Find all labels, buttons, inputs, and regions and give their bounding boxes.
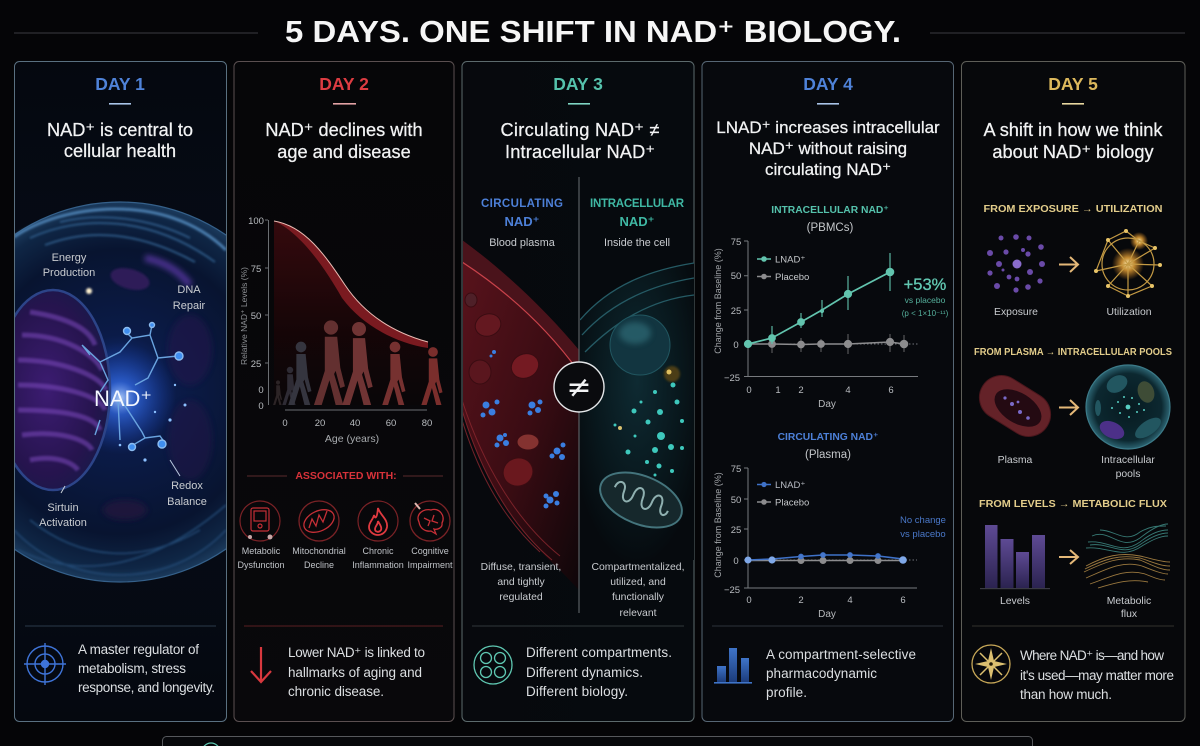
day 5 takeaway: it's used—may matter more: [1020, 668, 1174, 683]
day 5 takeaway: Where NAD⁺ is—and how: [1020, 648, 1164, 663]
day 3 heading: Circulating NAD⁺ ≠: [500, 120, 660, 140]
line chart: circulating NAD+: 2: [798, 595, 804, 606]
line chart: circulating NAD+: 25: [731, 525, 741, 536]
labels: associated conditions: [237, 546, 453, 570]
line chart: intracellular NAD+: 4: [845, 385, 851, 396]
associated with heading: ASSOCIATED WITH:: [295, 470, 397, 482]
caption: circulating: Diffuse, transient,: [481, 562, 561, 573]
line chart: intracellular NAD+: 75: [731, 237, 741, 248]
caption: circulating: [481, 562, 561, 603]
panel: day 3: [462, 62, 694, 722]
caption: intracellular: functionally: [612, 592, 665, 603]
label: intracellular NAD+: Inside the cell: [604, 237, 670, 249]
caption: intracellular: relevant: [620, 608, 657, 619]
label: metabolic flux: Metabolic: [1107, 596, 1151, 607]
icon: plasma vessel: [971, 367, 1059, 445]
callout: no change: No change: [900, 515, 946, 526]
line chart: intracellular NAD+: [713, 237, 949, 410]
day 1 takeaway: [78, 642, 215, 695]
molecule: [82, 322, 183, 450]
icon: chronic inflammation: [358, 501, 398, 541]
callout: no change: [900, 515, 946, 540]
day 2 heading: [265, 74, 423, 162]
chart heading: intracellular: INTRACELLULAR NAD⁺: [771, 205, 889, 216]
panel: day 1: [14, 61, 227, 722]
day 5 takeaway: [1020, 648, 1174, 702]
line chart: intracellular NAD+: Change from Baseline (%): [713, 248, 723, 354]
chart heading: circulating: CIRCULATING NAD⁺: [778, 432, 878, 443]
day 1 takeaway: response, and longevity.: [78, 680, 215, 695]
labels: associated conditions: Metabolic: [242, 546, 281, 556]
day 4 takeaway: profile.: [766, 685, 807, 700]
day 4 heading: [716, 74, 940, 179]
bottom panel: cropped edge: [162, 736, 1032, 746]
day 1 heading: NAD⁺ is central to: [47, 120, 193, 140]
day 5 heading: about NAD⁺ biology: [992, 142, 1155, 162]
day 4 heading: LNAD⁺ increases intracellular: [716, 118, 940, 137]
label: sirtuin activation: [39, 502, 87, 529]
line chart: circulating NAD+: Change from Baseline (%): [713, 472, 723, 578]
label: metabolic flux: flux: [1121, 609, 1138, 620]
chart: NAD+ decline with age: 25: [251, 359, 261, 370]
chart: NAD+ decline with age: Relative NAD⁺ Levels (%): [239, 267, 249, 365]
chart: NAD+ decline with age: 50: [251, 311, 261, 322]
line chart: intracellular NAD+: 6: [888, 385, 894, 396]
line chart: circulating NAD+: 0: [746, 595, 752, 606]
series: placebo: [748, 558, 903, 564]
line chart: circulating NAD+: 0: [733, 556, 739, 567]
callout: +53%: [902, 276, 949, 318]
label: circulating NAD+: [481, 198, 563, 249]
day 5 heading: A shift in how we think: [984, 120, 1163, 140]
day 2 heading: age and disease: [277, 142, 411, 162]
arrow: [1059, 257, 1078, 272]
day 2 heading: NAD⁺ declines with: [265, 120, 423, 140]
line chart: intracellular NAD+: 50: [731, 271, 741, 282]
illustration: cell with NAD+: [15, 201, 226, 583]
callout: +53%: vs placebo: [905, 295, 946, 305]
line chart: circulating NAD+: 75: [731, 464, 741, 475]
legend: LNAD⁺: [775, 480, 805, 491]
mitochondrion: [599, 472, 683, 528]
label: intracellular pools: [1101, 455, 1155, 480]
label: DNA repair: DNA: [177, 284, 201, 296]
chart heading: intracellular: [771, 205, 889, 234]
icon: target: [24, 643, 66, 685]
label: exposure: Exposure: [994, 307, 1038, 318]
line chart: circulating NAD+: −25: [724, 585, 740, 596]
line chart: circulating NAD+: 50: [731, 495, 741, 506]
label: intracellular NAD+: NAD⁺: [619, 214, 655, 229]
panel: day 2: [234, 62, 454, 722]
line chart: intracellular NAD+: Day: [818, 399, 836, 410]
labels: associated conditions: Inflammation: [352, 560, 404, 570]
labels: associated conditions: Cognitive: [411, 546, 449, 556]
legend: Placebo: [775, 272, 809, 283]
chart: NAD+ decline with age: 100: [248, 216, 264, 227]
chart: NAD+ decline with age: 20: [315, 418, 325, 429]
day 2 heading: DAY 2: [319, 74, 369, 94]
chart: NAD+ decline with age: 80: [422, 418, 432, 429]
icon: metabolic dysfunction: [240, 501, 280, 541]
title: 5 DAYS. ONE SHIFT IN NAD⁺ BIOLOGY.: [285, 14, 901, 49]
heading: levels to flux: FROM LEVELS → METABOLIC FLUX: [979, 499, 1167, 510]
label: NAD+ centre: NAD⁺: [94, 386, 152, 411]
mitochondrion: [15, 288, 112, 492]
label: intracellular NAD+: INTRACELLULAR: [590, 198, 685, 210]
chart: NAD+ decline with age: 75: [251, 264, 261, 275]
series: LNAD+: [744, 253, 894, 348]
day 4 takeaway: A compartment-selective: [766, 647, 916, 662]
silhouettes: ageing figures: [273, 320, 443, 405]
day 4 heading: DAY 4: [803, 74, 853, 94]
icon: compass star: [972, 645, 1010, 683]
chart: NAD+ decline with age: 0: [258, 385, 264, 396]
day 3 heading: [500, 74, 660, 162]
illustration: blood vessel: [462, 240, 579, 590]
day 3 heading: DAY 3: [553, 74, 603, 94]
icon: levels bars: [980, 525, 1050, 589]
caption: intracellular: Compartmentalized,: [592, 562, 684, 573]
day 1 heading: DAY 1: [95, 74, 145, 94]
line chart: intracellular NAD+: 2: [798, 385, 804, 396]
label: intracellular pools: pools: [1116, 469, 1140, 480]
day 5 heading: [984, 74, 1163, 162]
label: utilization: Utilization: [1106, 307, 1152, 318]
labels: associated conditions: Impairment: [407, 560, 453, 570]
line chart: intracellular NAD+: 0: [733, 340, 739, 351]
series: placebo: [748, 334, 908, 354]
illustration: intracellular compartment: [580, 263, 694, 560]
labels: associated conditions: Dysfunction: [237, 560, 285, 570]
arrow: [1059, 550, 1078, 564]
day 1 heading: cellular health: [64, 141, 176, 161]
chart: NAD+ decline with age: Age (years): [325, 433, 379, 445]
icon: not equal: [554, 362, 604, 412]
callout: +53%: (p < 1×10⁻¹¹): [902, 309, 949, 318]
chart heading: circulating: [778, 432, 878, 461]
day 3 takeaway: Different biology.: [526, 684, 628, 699]
chart: NAD+ decline with age: 0: [258, 401, 264, 412]
day 5 heading: DAY 5: [1048, 74, 1098, 94]
label: DNA repair: Repair: [173, 300, 206, 312]
label: metabolic flux: [1107, 596, 1151, 620]
day 2 takeaway: Lower NAD⁺ is linked to: [288, 645, 425, 660]
label: circulating NAD+: NAD⁺: [504, 214, 540, 229]
chart: NAD+ decline with age: 40: [350, 418, 360, 429]
day 4 heading: circulating NAD⁺: [765, 160, 891, 179]
day 5 takeaway: than how much.: [1020, 687, 1112, 702]
centre divider: [578, 177, 580, 613]
line chart: circulating NAD+: 6: [900, 595, 906, 606]
day 1 takeaway: A master regulator of: [78, 642, 199, 657]
day 2 takeaway: hallmarks of aging and: [288, 665, 422, 680]
caption: circulating: and tightly: [497, 577, 545, 588]
series: LNAD+: [744, 553, 907, 564]
callout: no change: vs placebo: [900, 529, 946, 540]
labels: associated conditions: Mitochondrial: [292, 546, 346, 556]
label: sirtuin activation: Activation: [39, 517, 87, 529]
panel: day 5: [962, 62, 1185, 722]
icon: four compartments: [474, 646, 512, 684]
chart: NAD+ decline with age: 0: [282, 418, 288, 429]
label: redox balance: Redox: [171, 480, 203, 492]
day 3 takeaway: Different compartments.: [526, 645, 672, 660]
label: redox balance: [167, 480, 207, 508]
line chart: intracellular NAD+: −25: [724, 373, 740, 384]
label: energy production: Production: [43, 267, 95, 279]
day 2 takeaway: [288, 645, 425, 699]
legend: Placebo: [775, 498, 809, 508]
label: circulating NAD+: Blood plasma: [489, 237, 555, 249]
icon: down arrow: [251, 647, 271, 682]
chart: NAD+ decline with age: 60: [386, 418, 396, 429]
arrow: [1059, 400, 1078, 415]
caption: circulating: regulated: [499, 592, 543, 603]
label: energy production: [43, 252, 95, 279]
label: energy production: Energy: [52, 252, 87, 264]
day 1 heading: [47, 74, 193, 161]
icon: utilization network: [1094, 229, 1162, 298]
label: redox balance: Balance: [167, 496, 207, 508]
chart heading: circulating: (Plasma): [805, 449, 851, 461]
icon: cognitive impairment: [410, 501, 450, 541]
chart heading: intracellular: (PBMCs): [807, 222, 853, 234]
day 3 takeaway: [526, 645, 672, 699]
icon: exposure dots: [987, 234, 1045, 293]
icon: cell with pools: [1086, 365, 1170, 449]
caption: intracellular: utilized, and: [610, 577, 666, 588]
labels: associated conditions: Chronic: [362, 546, 394, 556]
callout: +53%: +53%: [904, 276, 947, 294]
heading: exposure to utilization: FROM EXPOSURE → UTILIZATION: [984, 204, 1162, 215]
day 2 takeaway: chronic disease.: [288, 684, 384, 699]
label: levels: Levels: [1000, 596, 1030, 607]
icon: mitochondrial decline: [299, 501, 339, 541]
line chart: intracellular NAD+: 25: [731, 306, 741, 317]
line chart: intracellular NAD+: 0: [746, 385, 752, 396]
day 1 takeaway: metabolism, stress: [78, 661, 186, 676]
icon: not equal: ≠: [566, 370, 592, 405]
line chart: circulating NAD+: [713, 464, 946, 620]
label: circulating NAD+: CIRCULATING: [481, 198, 563, 210]
line chart: circulating NAD+: 4: [847, 595, 853, 606]
day 4 heading: NAD⁺ without raising: [749, 139, 907, 158]
legend: [757, 480, 809, 508]
label: intracellular NAD+: [590, 198, 685, 249]
day 4 takeaway: pharmacodynamic: [766, 666, 877, 681]
heading: plasma to intracellular: FROM PLASMA → INTRACELLULAR POOLS: [974, 347, 1172, 358]
day 3 takeaway: Different dynamics.: [526, 665, 643, 680]
day 4 takeaway: [766, 647, 916, 700]
day 3 heading: Intracellular NAD⁺: [505, 142, 655, 162]
icon: metabolic flux: [1084, 524, 1170, 588]
legend: [757, 254, 809, 283]
label: intracellular pools: Intracellular: [1101, 455, 1155, 466]
label: plasma: Plasma: [998, 455, 1033, 466]
line chart: circulating NAD+: Day: [818, 609, 836, 620]
panel: day 4: [702, 62, 954, 722]
label: sirtuin activation: Sirtuin: [47, 502, 79, 514]
chart: NAD+ decline with age: [239, 216, 443, 445]
line chart: intracellular NAD+: 1: [775, 385, 781, 396]
caption: intracellular: [592, 562, 684, 619]
labels: associated conditions: Decline: [304, 560, 334, 570]
legend: LNAD⁺: [775, 254, 805, 266]
label: DNA repair: [173, 284, 206, 312]
icon: bar chart: [714, 648, 752, 684]
